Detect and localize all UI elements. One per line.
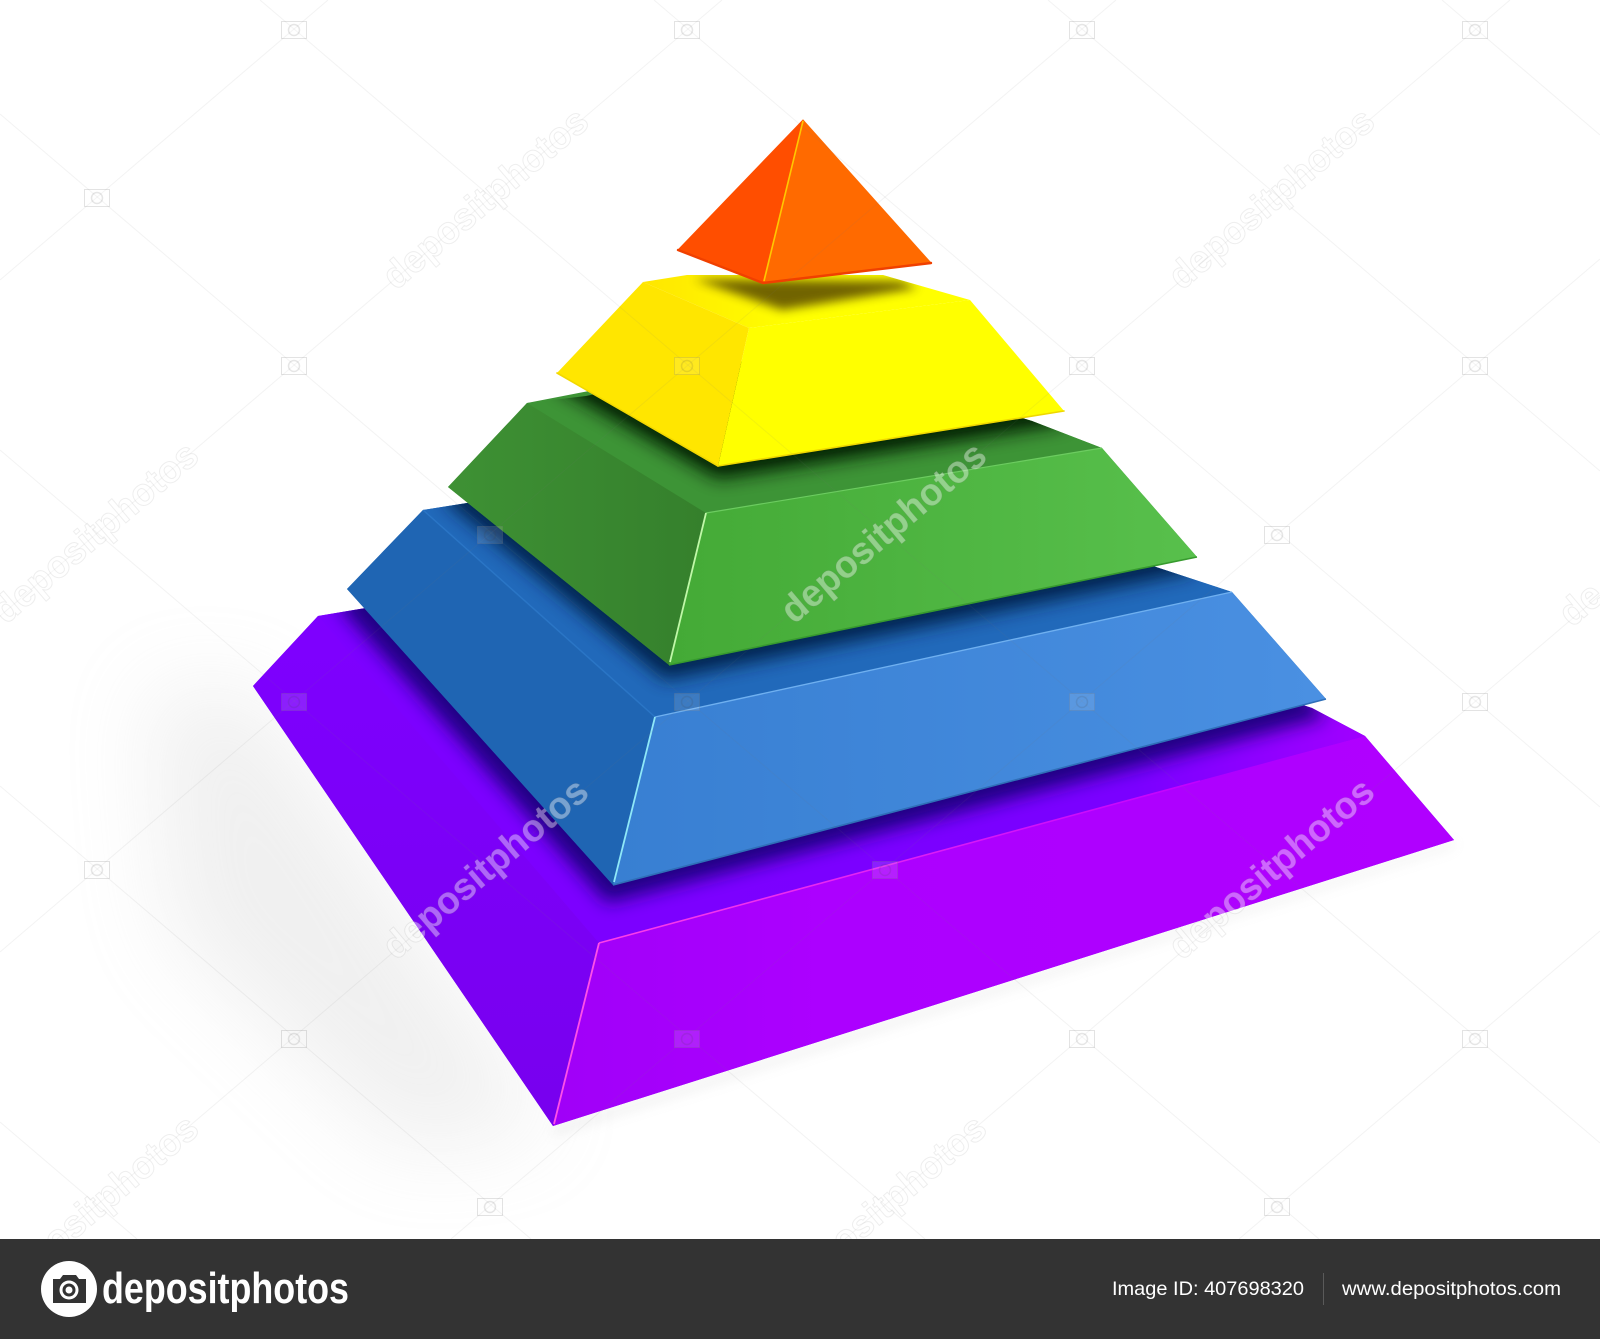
footer bar	[0, 1239, 1600, 1339]
watermark camera icons	[84, 22, 1488, 1216]
level 5: purple base	[253, 608, 1454, 1126]
shadow of green on blue	[438, 503, 1197, 690]
watermark text: depositphotos	[773, 434, 995, 632]
level 1: orange apex	[678, 120, 931, 283]
website url: www.depositphotos.com	[1341, 1278, 1561, 1300]
logo wordmark: depositphotos	[102, 1264, 349, 1313]
icon: depositphotos camera logo	[41, 1261, 97, 1317]
level 4: blue	[347, 502, 1326, 886]
shadow of orange on yellow	[694, 279, 918, 310]
watermark text: depositphotos	[375, 770, 597, 968]
level 3: green	[448, 362, 1198, 666]
level 2: yellow	[557, 275, 1064, 466]
watermark text: depositphotos	[375, 100, 597, 298]
watermark text: depositphotos	[1161, 100, 1383, 298]
pyramid	[253, 120, 1454, 1126]
image id: Image ID: 407698320	[1112, 1278, 1304, 1300]
watermark text: depositphotos	[773, 1107, 995, 1305]
shadow of yellow on green	[554, 362, 1066, 491]
shadow of blue on purple	[332, 608, 1332, 914]
watermark text: depositphotos	[1161, 770, 1383, 968]
ground shadow	[150, 690, 1454, 1150]
